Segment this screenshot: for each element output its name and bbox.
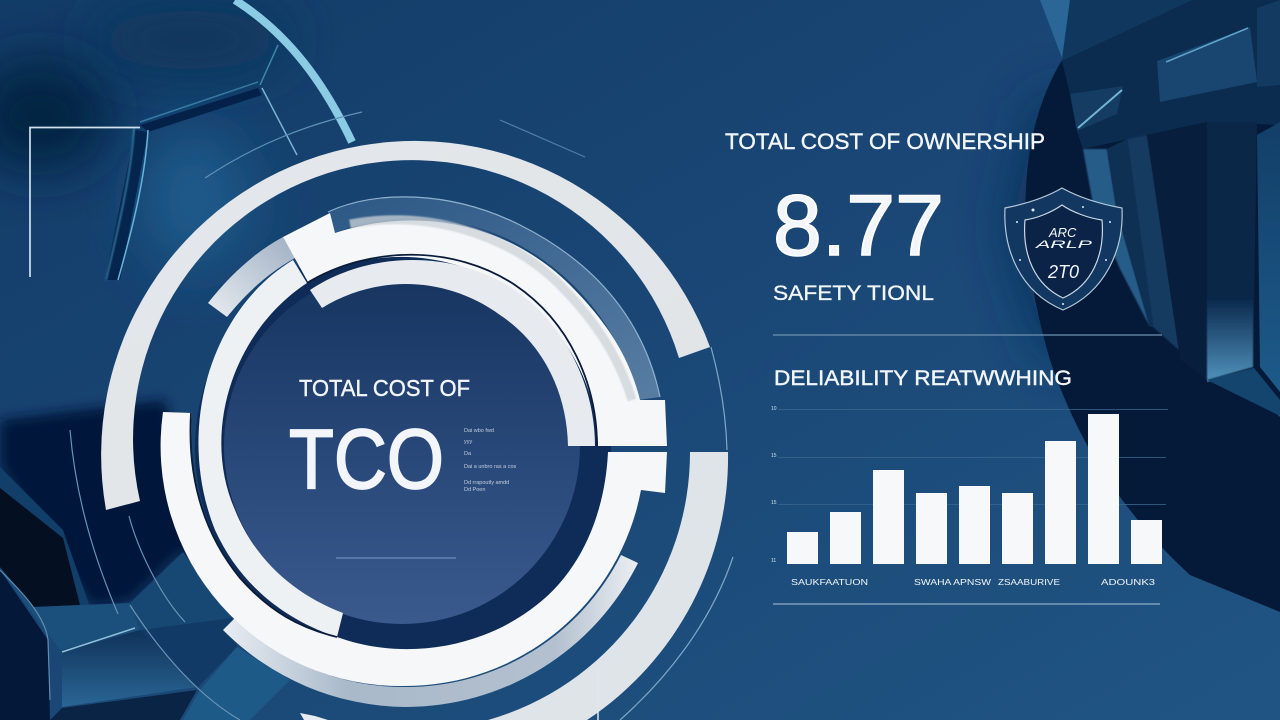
icon: shield badge: ARLP bbox=[1034, 239, 1093, 251]
outer ring tip bbox=[300, 713, 328, 720]
outer ring top bbox=[101, 141, 710, 510]
bar chart: 15 bbox=[771, 453, 777, 459]
center small notes: Dai wbo fwd bbox=[464, 428, 494, 434]
center small notes: Da bbox=[464, 451, 472, 457]
inner ring left bbox=[198, 260, 343, 637]
bar chart bbox=[771, 406, 1168, 604]
center divider bbox=[336, 557, 456, 559]
outer ring lower right bbox=[488, 452, 728, 720]
center small notes: Dai a unbro ras a cos bbox=[464, 464, 517, 470]
thin outer arcs right bbox=[598, 347, 733, 720]
icon: shield badge bbox=[1005, 188, 1122, 310]
center small notes: Dd Poen bbox=[464, 487, 485, 493]
dark annulus bbox=[195, 240, 611, 656]
bar chart: ADOUNK3 bbox=[1101, 577, 1155, 587]
center small notes: Dd rrapoutly amdd bbox=[464, 480, 509, 486]
bar chart: ZSAABURIVE bbox=[998, 577, 1060, 587]
center TCO: TCO bbox=[289, 412, 444, 506]
inner blue disc bbox=[224, 268, 580, 624]
bar chart: SAUKFAATUON bbox=[791, 577, 868, 587]
bar chart: 11 bbox=[771, 558, 776, 564]
icon: shield badge: ARC bbox=[1048, 225, 1077, 240]
kpi label: SAFETY TIONL bbox=[773, 282, 934, 305]
divider bbox=[773, 334, 1162, 336]
kpi heading: TOTAL COST OF OWNERSHIP bbox=[725, 129, 1045, 154]
right decor: dark crescent and panels bbox=[1026, 0, 1280, 612]
lower-left thin arcs bbox=[0, 430, 240, 720]
chart heading: DELIABILITY REATWWHING bbox=[774, 367, 1072, 390]
ring two shading bbox=[350, 220, 632, 400]
white ring two bbox=[283, 213, 667, 446]
separator lines bbox=[190, 255, 597, 637]
bar chart: 10 bbox=[771, 406, 777, 412]
center heading: TOTAL COST OF bbox=[299, 375, 470, 401]
center small notes bbox=[464, 428, 517, 493]
left decor: seat panels bbox=[0, 0, 585, 720]
gray ring bottom bbox=[223, 555, 638, 707]
center small notes: yyy bbox=[464, 439, 472, 445]
large white ring bbox=[161, 412, 667, 686]
gray segment bbox=[208, 237, 295, 317]
bar chart: SWAHA APNSW bbox=[914, 577, 991, 587]
blue band bbox=[328, 197, 660, 400]
bracket line bbox=[30, 128, 140, 277]
kpi value: 8.77 bbox=[773, 178, 944, 274]
bar chart: 15 bbox=[771, 500, 777, 506]
icon: shield badge: 2T0 bbox=[1047, 262, 1079, 282]
inner ring top bbox=[310, 260, 595, 446]
